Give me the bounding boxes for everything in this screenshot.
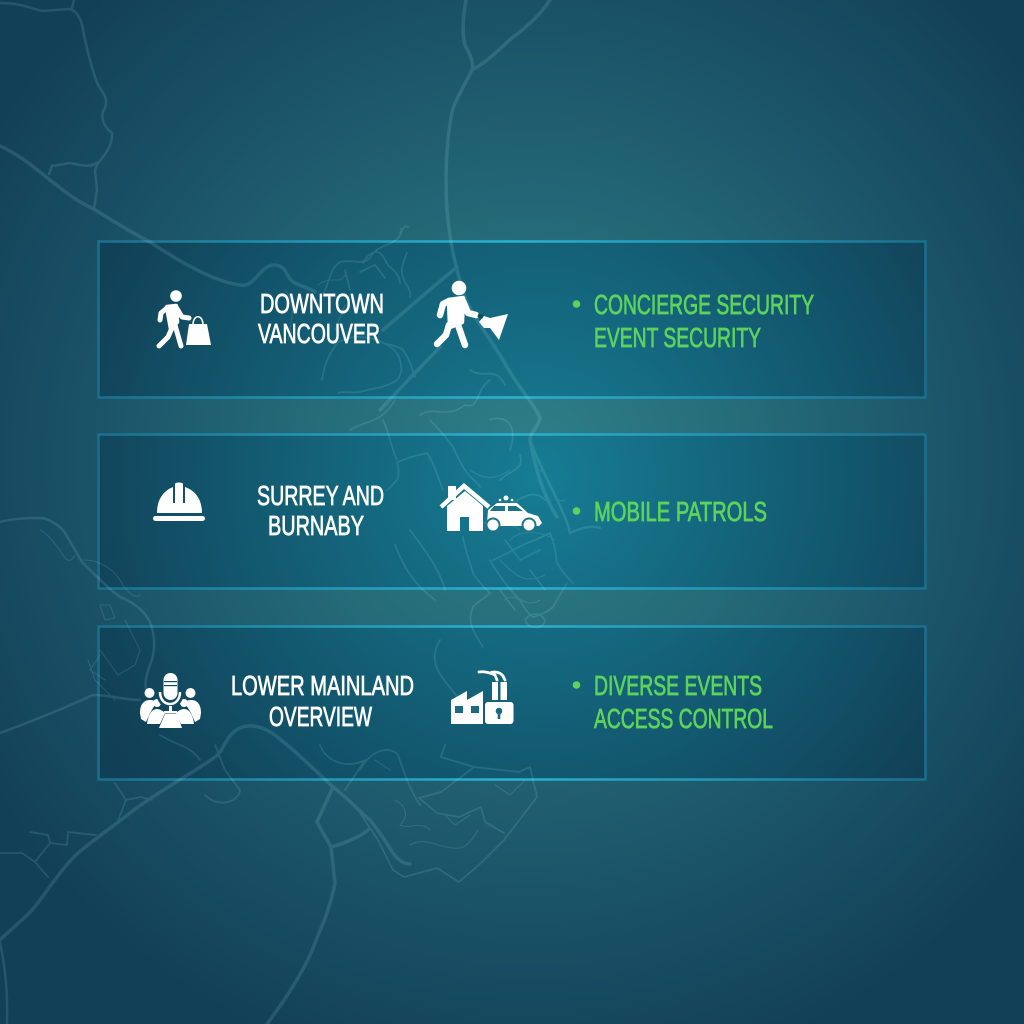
icon: factory with padlock [451,672,514,724]
icon: pedestrian with shopping bag [159,290,211,346]
service list: Lower Mainland: ACCESS CONTROL [594,703,773,734]
panel: Surrey and Burnaby [98,434,926,588]
service list: Lower Mainland [573,670,773,734]
icon: guard with flashlight [437,281,508,345]
heading: Downtown Vancouver [258,288,384,349]
panel background [98,434,926,588]
service list: Lower Mainland: DIVERSE EVENTS [594,670,762,701]
panel: Downtown Vancouver [98,242,926,398]
service list: Downtown: EVENT SECURITY [594,322,761,353]
heading: Lower Mainland Overview [231,670,414,732]
panel: Lower Mainland Overview [98,626,926,780]
icon: microphone and audience [140,673,201,728]
heading: Lower Mainland Overview: OVERVIEW [269,701,372,732]
service list: Downtown: CONCIERGE SECURITY [594,289,814,320]
icon: hard hat [153,482,205,521]
heading: Surrey and Burnaby: SURREY AND [257,480,384,511]
panel background [98,626,926,780]
heading: Downtown Vancouver: DOWNTOWN [260,288,384,319]
heading: Downtown Vancouver: VANCOUVER [258,318,380,349]
heading: Lower Mainland Overview: LOWER MAINLAND [231,670,414,701]
background map lines [0,0,600,1024]
icon: house and patrol car [441,486,542,532]
heading: Surrey and Burnaby [257,480,384,541]
service list: Downtown [573,289,814,353]
heading: Surrey and Burnaby: BURNABY [268,510,364,541]
panel background [98,242,926,398]
service list: Surrey [573,496,767,527]
service list: Surrey: MOBILE PATROLS [594,496,767,527]
